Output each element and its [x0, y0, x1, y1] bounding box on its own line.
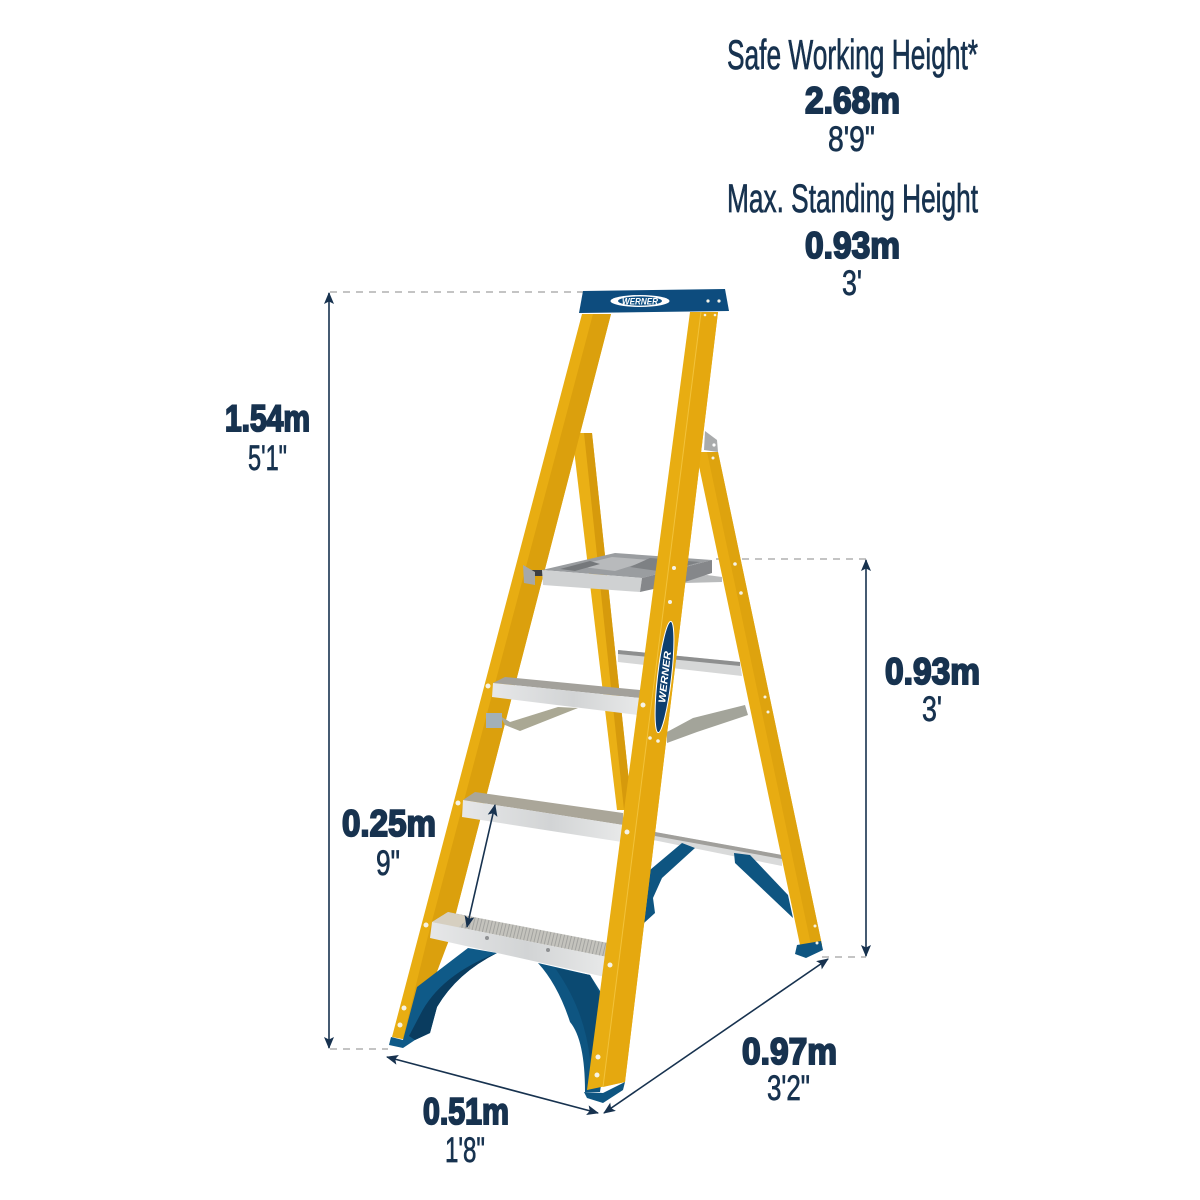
rear right foot — [795, 941, 823, 958]
label: standing height: 3' — [922, 690, 942, 729]
label: width — [423, 1091, 509, 1170]
title: max standing height: Max. Standing Height — [727, 177, 978, 221]
rear left strut — [572, 433, 632, 810]
label: width: 0.51m — [423, 1091, 509, 1132]
title: max standing height: 0.93m — [805, 225, 900, 266]
rail decal: werner logo: WERNER — [657, 650, 674, 704]
front right blue foot brace — [538, 963, 612, 1092]
dashed guide lines — [330, 292, 866, 1049]
front right foot — [584, 1082, 625, 1103]
label: depth: 0.97m — [742, 1031, 837, 1072]
cap logo — [610, 295, 670, 307]
label: step spacing: 9" — [376, 844, 400, 883]
cap logo: WERNER — [622, 296, 658, 306]
ladder — [389, 289, 823, 1103]
upper tread — [492, 677, 640, 715]
label: standing height: 0.93m — [885, 651, 980, 692]
front right rail — [587, 312, 718, 1090]
platform — [542, 553, 712, 592]
label: depth — [742, 1031, 837, 1108]
front left blue foot brace — [389, 948, 497, 1048]
label: standing height — [885, 651, 980, 729]
title: max standing height: 3' — [842, 264, 862, 303]
label: overall height: 5'1" — [248, 439, 287, 478]
front left rail — [392, 314, 611, 1040]
title: safe working height: 8'9" — [828, 120, 875, 159]
arrow: overall height — [328, 293, 330, 1048]
arrow: width — [387, 1057, 598, 1113]
label: width: 1'8" — [445, 1131, 485, 1170]
rail decal: werner logo — [651, 621, 678, 733]
title: max standing height — [727, 177, 978, 303]
right spreader brace — [667, 705, 748, 743]
title: safe working height: Safe Working Height* — [727, 31, 978, 78]
rear blue braces — [644, 843, 793, 923]
arrow: depth — [604, 959, 828, 1113]
left spreader brace — [486, 707, 578, 731]
label: overall height: 1.54m — [225, 398, 310, 439]
hinge bracket — [704, 431, 718, 452]
arrow: step spacing — [467, 805, 495, 927]
title: safe working height: 2.68m — [805, 80, 900, 121]
rear right strut — [696, 431, 823, 958]
label: overall height — [225, 398, 310, 478]
title: safe working height — [727, 31, 978, 159]
label: step spacing: 0.25m — [342, 803, 436, 844]
arrow: standing height — [865, 560, 867, 956]
bottom tread — [430, 912, 608, 977]
platform rods — [523, 565, 722, 585]
rear rungs — [618, 650, 782, 866]
rivets — [398, 299, 818, 1077]
middle tread — [462, 792, 623, 842]
label: step spacing — [342, 803, 436, 883]
label: depth: 3'2" — [767, 1069, 810, 1108]
top cap — [579, 289, 729, 313]
